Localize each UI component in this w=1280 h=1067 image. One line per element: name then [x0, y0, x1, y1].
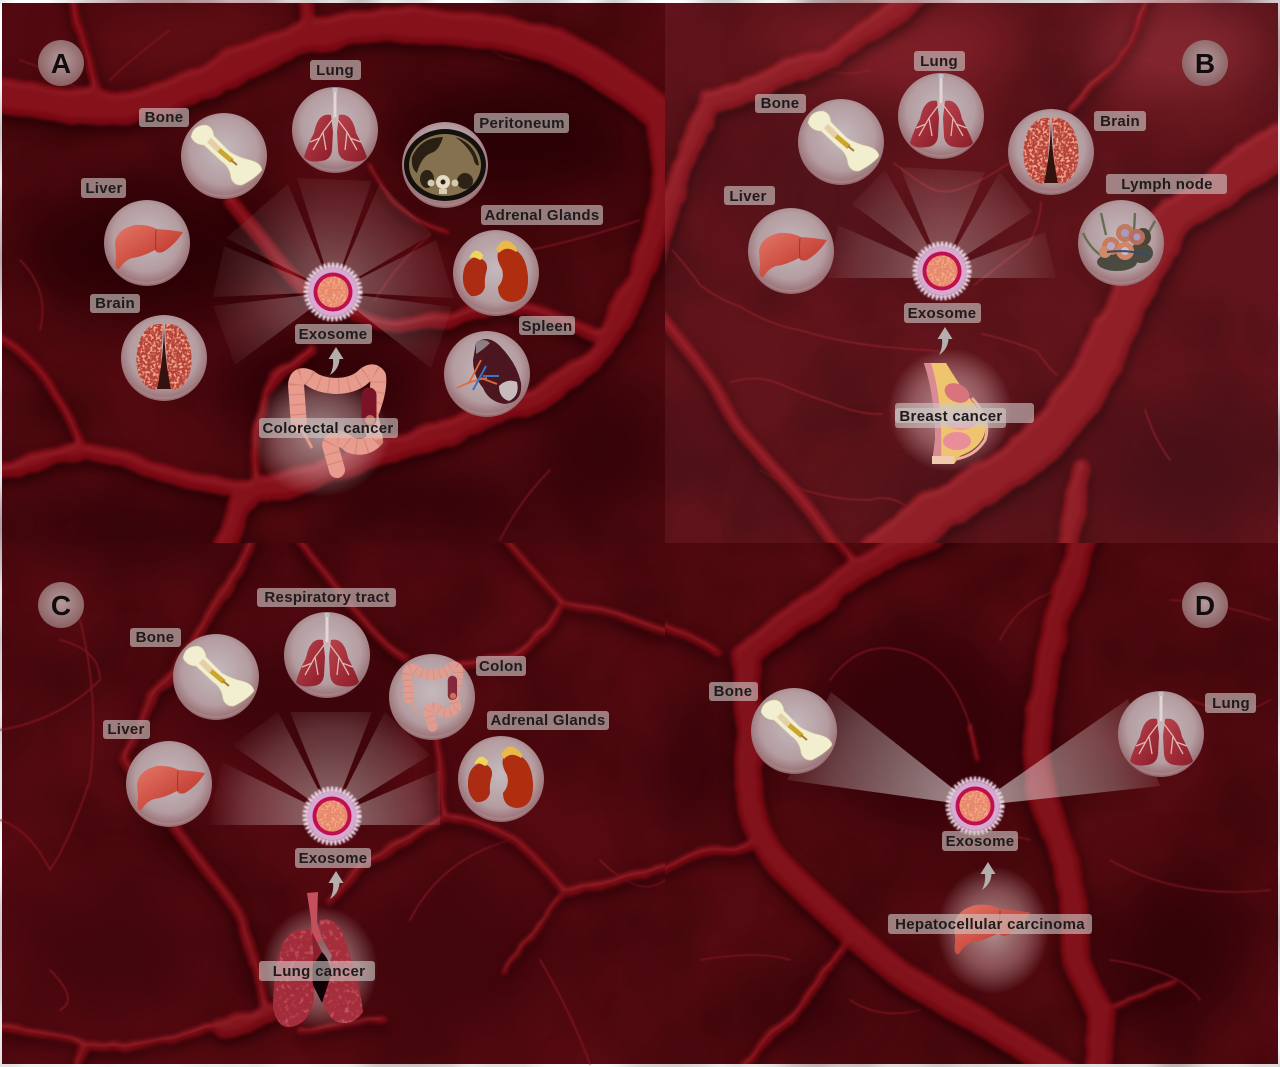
label: Exosome: Exosome [908, 305, 976, 322]
light rays C [208, 712, 440, 825]
organ: bone [173, 634, 259, 720]
primary tumour: colon [250, 372, 390, 497]
letter B [1182, 40, 1228, 86]
label: Lung: Lung [920, 53, 958, 70]
label: Lung cancer [259, 961, 375, 981]
label: Bone [130, 628, 181, 647]
label: Bone: Bone [761, 95, 799, 112]
label: Lymph node: Lymph node [1121, 176, 1213, 193]
label: Brain [1094, 111, 1146, 131]
letter D [1182, 582, 1228, 628]
label: Spleen: Spleen [522, 318, 572, 335]
organ: adrenal glands [453, 230, 539, 316]
label: Breast cancer: Breast cancer [899, 408, 1003, 425]
label: Exosome: Exosome [946, 833, 1014, 850]
label: Brain: Brain [1100, 113, 1140, 130]
label: Bone: Bone [714, 683, 752, 700]
label: Adrenal Glands: Adrenal Glands [484, 207, 600, 224]
primary tumour: liver [937, 866, 1049, 994]
arrow C [328, 871, 344, 899]
label: Lung: Lung [316, 62, 354, 79]
arrow A [328, 347, 344, 375]
label: Lung [310, 60, 361, 80]
blood vessels D [640, 520, 1176, 1067]
letter D: D [1195, 590, 1215, 621]
organ: lung [292, 87, 378, 173]
label: Colon: Colon [479, 658, 523, 675]
blood vessels C [0, 520, 690, 1067]
exosome B [915, 244, 969, 298]
organ: lung [1118, 691, 1204, 777]
organ: peritoneum [402, 122, 488, 208]
organ: lymph node [1078, 200, 1164, 286]
panel B: breast cancer [724, 40, 1228, 472]
organ: brain [121, 315, 207, 401]
label: Liver: Liver [107, 721, 145, 738]
label: Bone [755, 94, 806, 113]
letter A [38, 40, 84, 86]
label: Brain: Brain [95, 295, 135, 312]
label: Lung: Lung [1212, 695, 1250, 712]
organ: bone [181, 113, 267, 199]
primary tumour: breast [888, 348, 1012, 472]
light rays A [213, 178, 454, 368]
organ: liver [748, 208, 834, 294]
exosome D [948, 779, 1002, 833]
blood vessels A [2, 3, 665, 543]
label: Lymph node [1106, 174, 1227, 194]
light rays D [787, 692, 1160, 806]
letter C [38, 582, 84, 628]
exosome A [306, 265, 360, 319]
organ: respiratory tract [284, 612, 370, 698]
label: Peritoneum: Peritoneum [479, 115, 565, 132]
label: Exosome: Exosome [299, 326, 367, 343]
label: Lung [914, 51, 965, 71]
panel C: lung cancer [38, 582, 609, 1030]
organ: brain [1008, 109, 1094, 195]
panel A: colorectal cancer [38, 40, 603, 497]
organ: liver [126, 741, 212, 827]
light rays B [828, 167, 1056, 278]
label: Adrenal Glands: Adrenal Glands [490, 712, 606, 729]
arrow B [938, 327, 952, 355]
label: Bone: Bone [136, 629, 174, 646]
letter C: C [51, 590, 71, 621]
organ: bone [798, 99, 884, 185]
label: Lung [1205, 693, 1256, 713]
label: Liver: Liver [85, 180, 123, 197]
label: Hepatocellular carcinoma: Hepatocellular carcinoma [895, 916, 1085, 933]
primary tumour: lung [262, 892, 378, 1030]
organ: bone [751, 688, 837, 774]
organ: lung [898, 73, 984, 159]
exosome C [305, 789, 359, 843]
label: Exosome: Exosome [299, 850, 367, 867]
arrow D [980, 862, 996, 890]
label: Colorectal cancer: Colorectal cancer [262, 420, 394, 437]
label: Liver [724, 186, 775, 205]
organ: colon [389, 654, 475, 740]
panel D: hepatocellular carcinoma [709, 582, 1256, 994]
label: Breast cancer [895, 403, 1034, 428]
blood vessels B [640, 0, 1280, 570]
organ: spleen [444, 331, 530, 417]
label: Lung cancer: Lung cancer [273, 963, 365, 980]
organ: adrenal glands [458, 736, 544, 822]
label: Bone [139, 108, 189, 127]
organ: liver [104, 200, 190, 286]
letter B: B [1195, 48, 1215, 79]
label: Bone: Bone [145, 109, 183, 126]
label: Liver: Liver [729, 188, 767, 205]
label: Respiratory tract: Respiratory tract [264, 589, 390, 606]
letter A: A [51, 48, 71, 79]
